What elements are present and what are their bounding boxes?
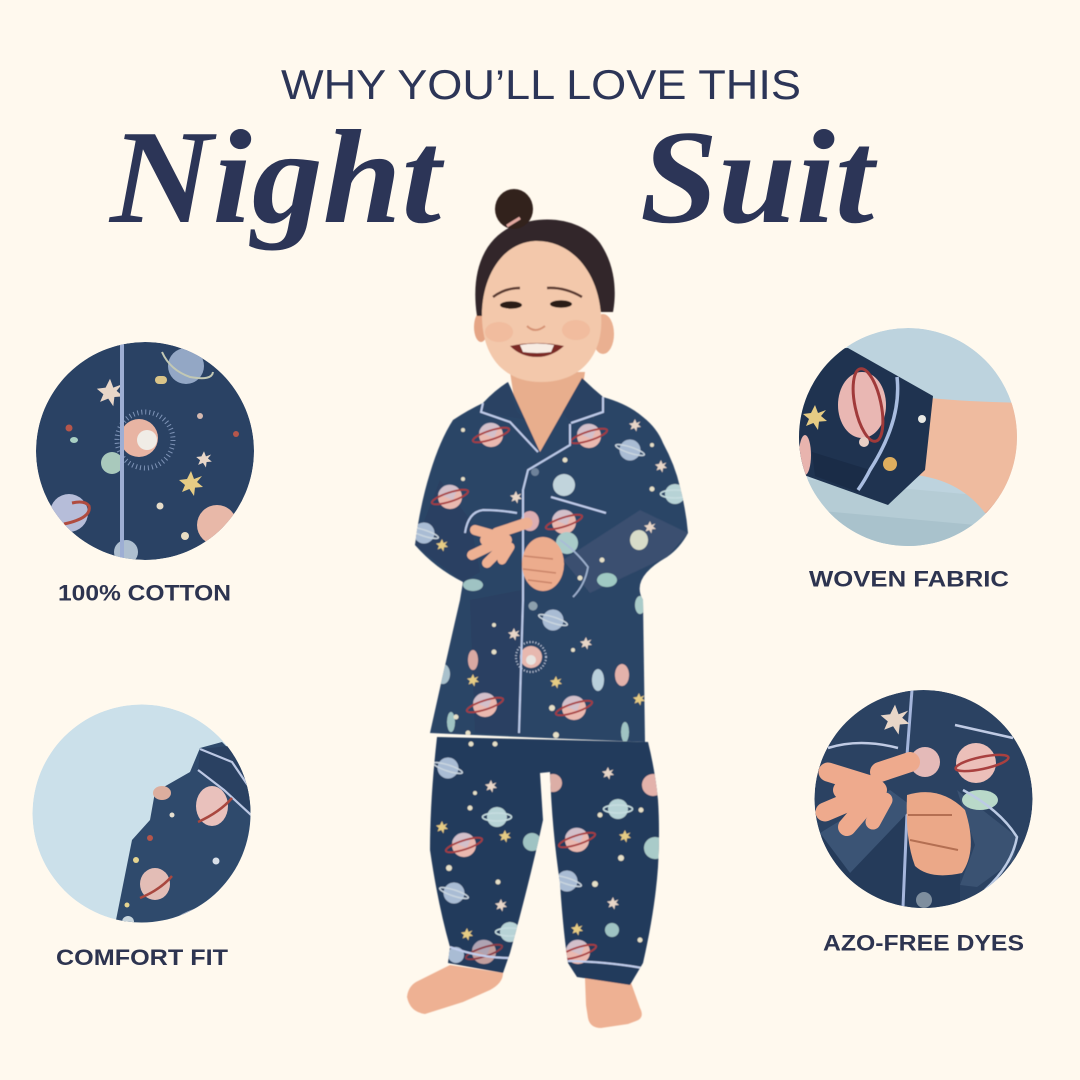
shirt: [409, 378, 690, 742]
label: azo-free dyes: AZO-FREE DYES: [823, 930, 1024, 956]
face: [482, 241, 601, 382]
feet: [407, 965, 642, 1028]
panel: comfort fit: [32, 704, 260, 970]
neck: [510, 372, 585, 456]
placket and pocket piping: [519, 424, 570, 733]
title: Suit: Suit: [640, 103, 878, 251]
pants: [430, 737, 666, 985]
label: woven fabric: WOVEN FABRIC: [809, 566, 1009, 592]
photo circle: hands on shirt: [810, 690, 1032, 915]
eyes: [500, 301, 522, 309]
hair tie: [507, 218, 520, 226]
heading: why you'll love this: WHY YOU’LL LOVE THIS: [281, 61, 801, 108]
panel: woven fabric: [799, 328, 1017, 586]
bun: [495, 189, 533, 229]
head: [474, 189, 615, 382]
label: 100% cotton: 100% COTTON: [58, 580, 231, 606]
title: Night: Night: [108, 103, 445, 251]
photo circle: shirt placket with button: [36, 342, 254, 564]
ears: [474, 312, 488, 342]
child in night suit: [407, 189, 690, 1028]
collar: [504, 380, 602, 418]
hands: [472, 523, 564, 591]
hair: [475, 220, 615, 316]
buttons: [528, 602, 538, 610]
cheeks: [485, 322, 513, 342]
panel: 100% cotton: [36, 342, 254, 606]
photo circle: sleeve cuff: [799, 328, 1017, 546]
mouth: [510, 343, 564, 357]
eyebrows: [493, 288, 582, 297]
photo circle: shoulder and collar: [32, 704, 260, 928]
nose: [527, 326, 545, 330]
panel: azo-free dyes: [810, 690, 1032, 956]
label: comfort fit: COMFORT FIT: [56, 945, 228, 970]
